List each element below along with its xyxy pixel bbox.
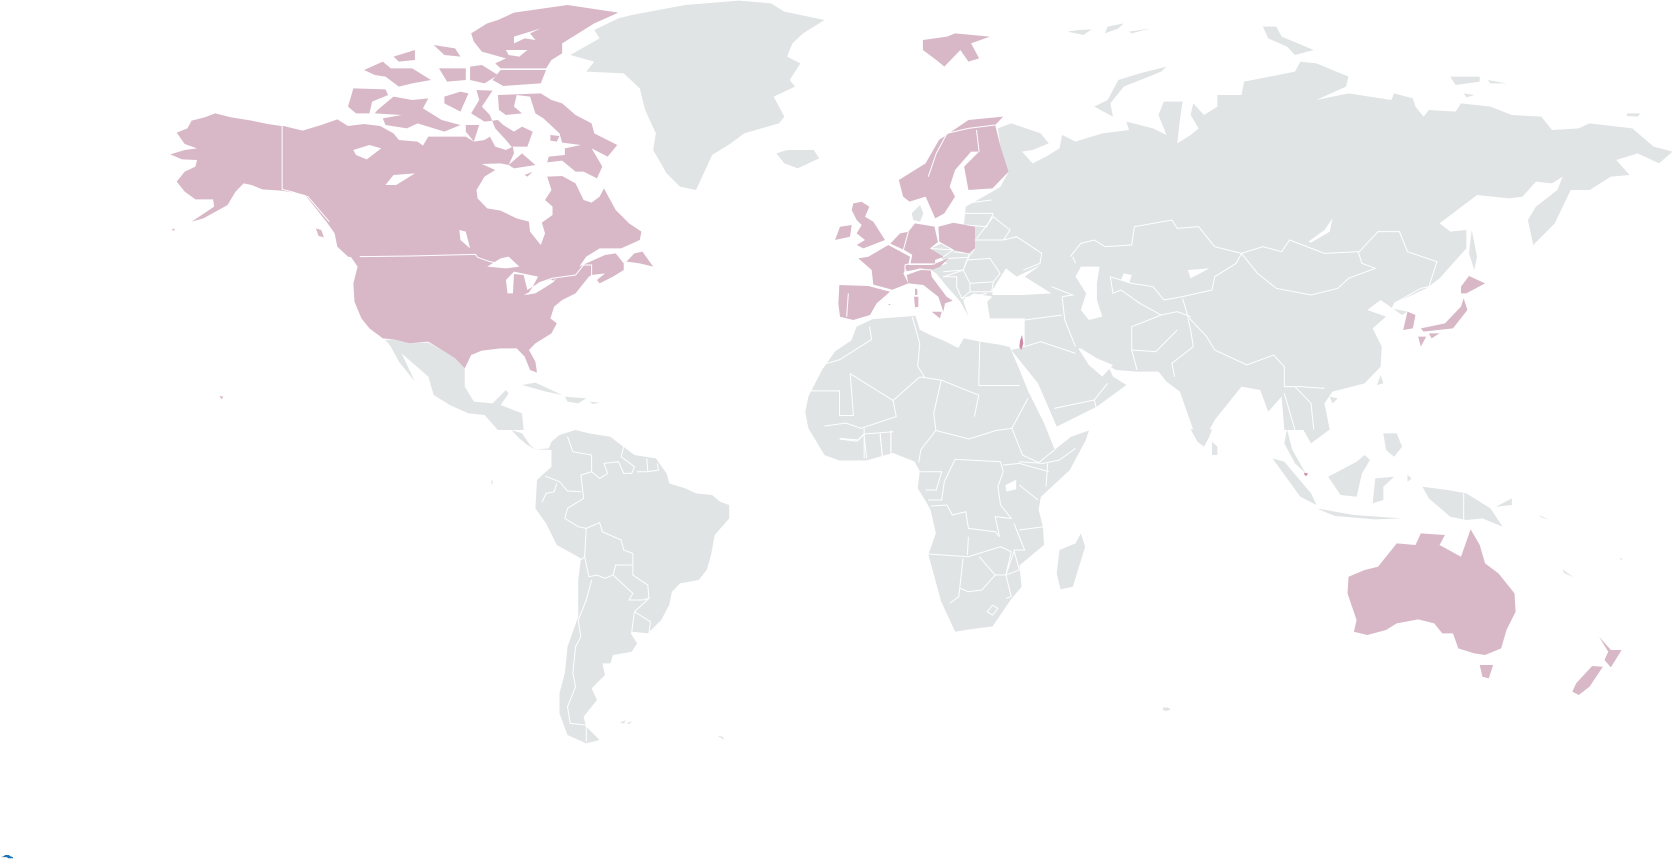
region: Mexico and Central America: [385, 339, 524, 430]
island: Greenland: [570, 1, 825, 190]
borders: Asia and eastern Europe: [1025, 220, 1437, 430]
lakes: Canada and Great Lakes: [353, 145, 557, 295]
country: New Zealand: [1572, 637, 1622, 695]
country: Australia: [1347, 529, 1516, 655]
panel: southeast asia and oceania: [1191, 429, 1623, 695]
islands: Galapagos, Falklands, South Georgia: [491, 480, 724, 740]
island: Kerguelen: [1163, 707, 1171, 711]
region: South America landmass: [511, 430, 729, 743]
panel: western europe: [835, 200, 1042, 350]
borders: South America: [542, 437, 659, 742]
country: Singapore: [1304, 473, 1308, 476]
region: Norway, Sweden, Finland: [899, 117, 1009, 218]
islands: New Caledonia and Pacific: [1539, 515, 1623, 577]
islands: Sri Lanka: [1212, 442, 1217, 455]
panel: north america: [170, 1, 825, 430]
countries: western Europe: [835, 202, 975, 320]
island: Tasmania: [1480, 665, 1493, 678]
panel: africa: [805, 316, 1089, 632]
island: Madagascar: [1057, 533, 1085, 589]
icon: blue fragment: [1, 855, 13, 858]
island: Iceland: [776, 150, 819, 168]
region: Canadian Arctic islands: [172, 5, 653, 267]
country: Israel: [1019, 335, 1023, 350]
borders: eastern Europe: [930, 200, 1042, 298]
region: southern tip of India: [1191, 429, 1212, 447]
island: Svalbard: [923, 33, 990, 67]
region: Eurasia landmass: [931, 62, 1672, 430]
islands: Indonesia, Philippines, New Guinea: [1273, 429, 1512, 527]
region: Canada and United States mainland: [170, 113, 641, 373]
borders: Canada and United States: [282, 126, 592, 283]
borders: central and southern Africa: [840, 432, 1076, 615]
region: Japan and South Korea: [1403, 276, 1485, 347]
borders: north and west Africa: [808, 317, 1055, 463]
islands: Caribbean: [522, 383, 600, 404]
panel: south america: [491, 430, 729, 743]
panel: southern Africa borders: [840, 432, 1171, 711]
borders: western Europe: [847, 227, 953, 317]
seas: Black Sea, Caspian, Aral, Balkhash, Baikal, Persian Gulf: [993, 218, 1332, 377]
country: Denmark: [912, 205, 923, 222]
panel: eurasia: [899, 23, 1672, 430]
region: Africa landmass: [805, 316, 1089, 632]
islands: Russian Arctic: [1067, 23, 1640, 403]
border: New Guinea: [1463, 493, 1465, 520]
borders: Scandinavia: [928, 125, 995, 177]
region: Hawaii: [220, 396, 223, 399]
lake: Victoria: [1005, 480, 1016, 491]
